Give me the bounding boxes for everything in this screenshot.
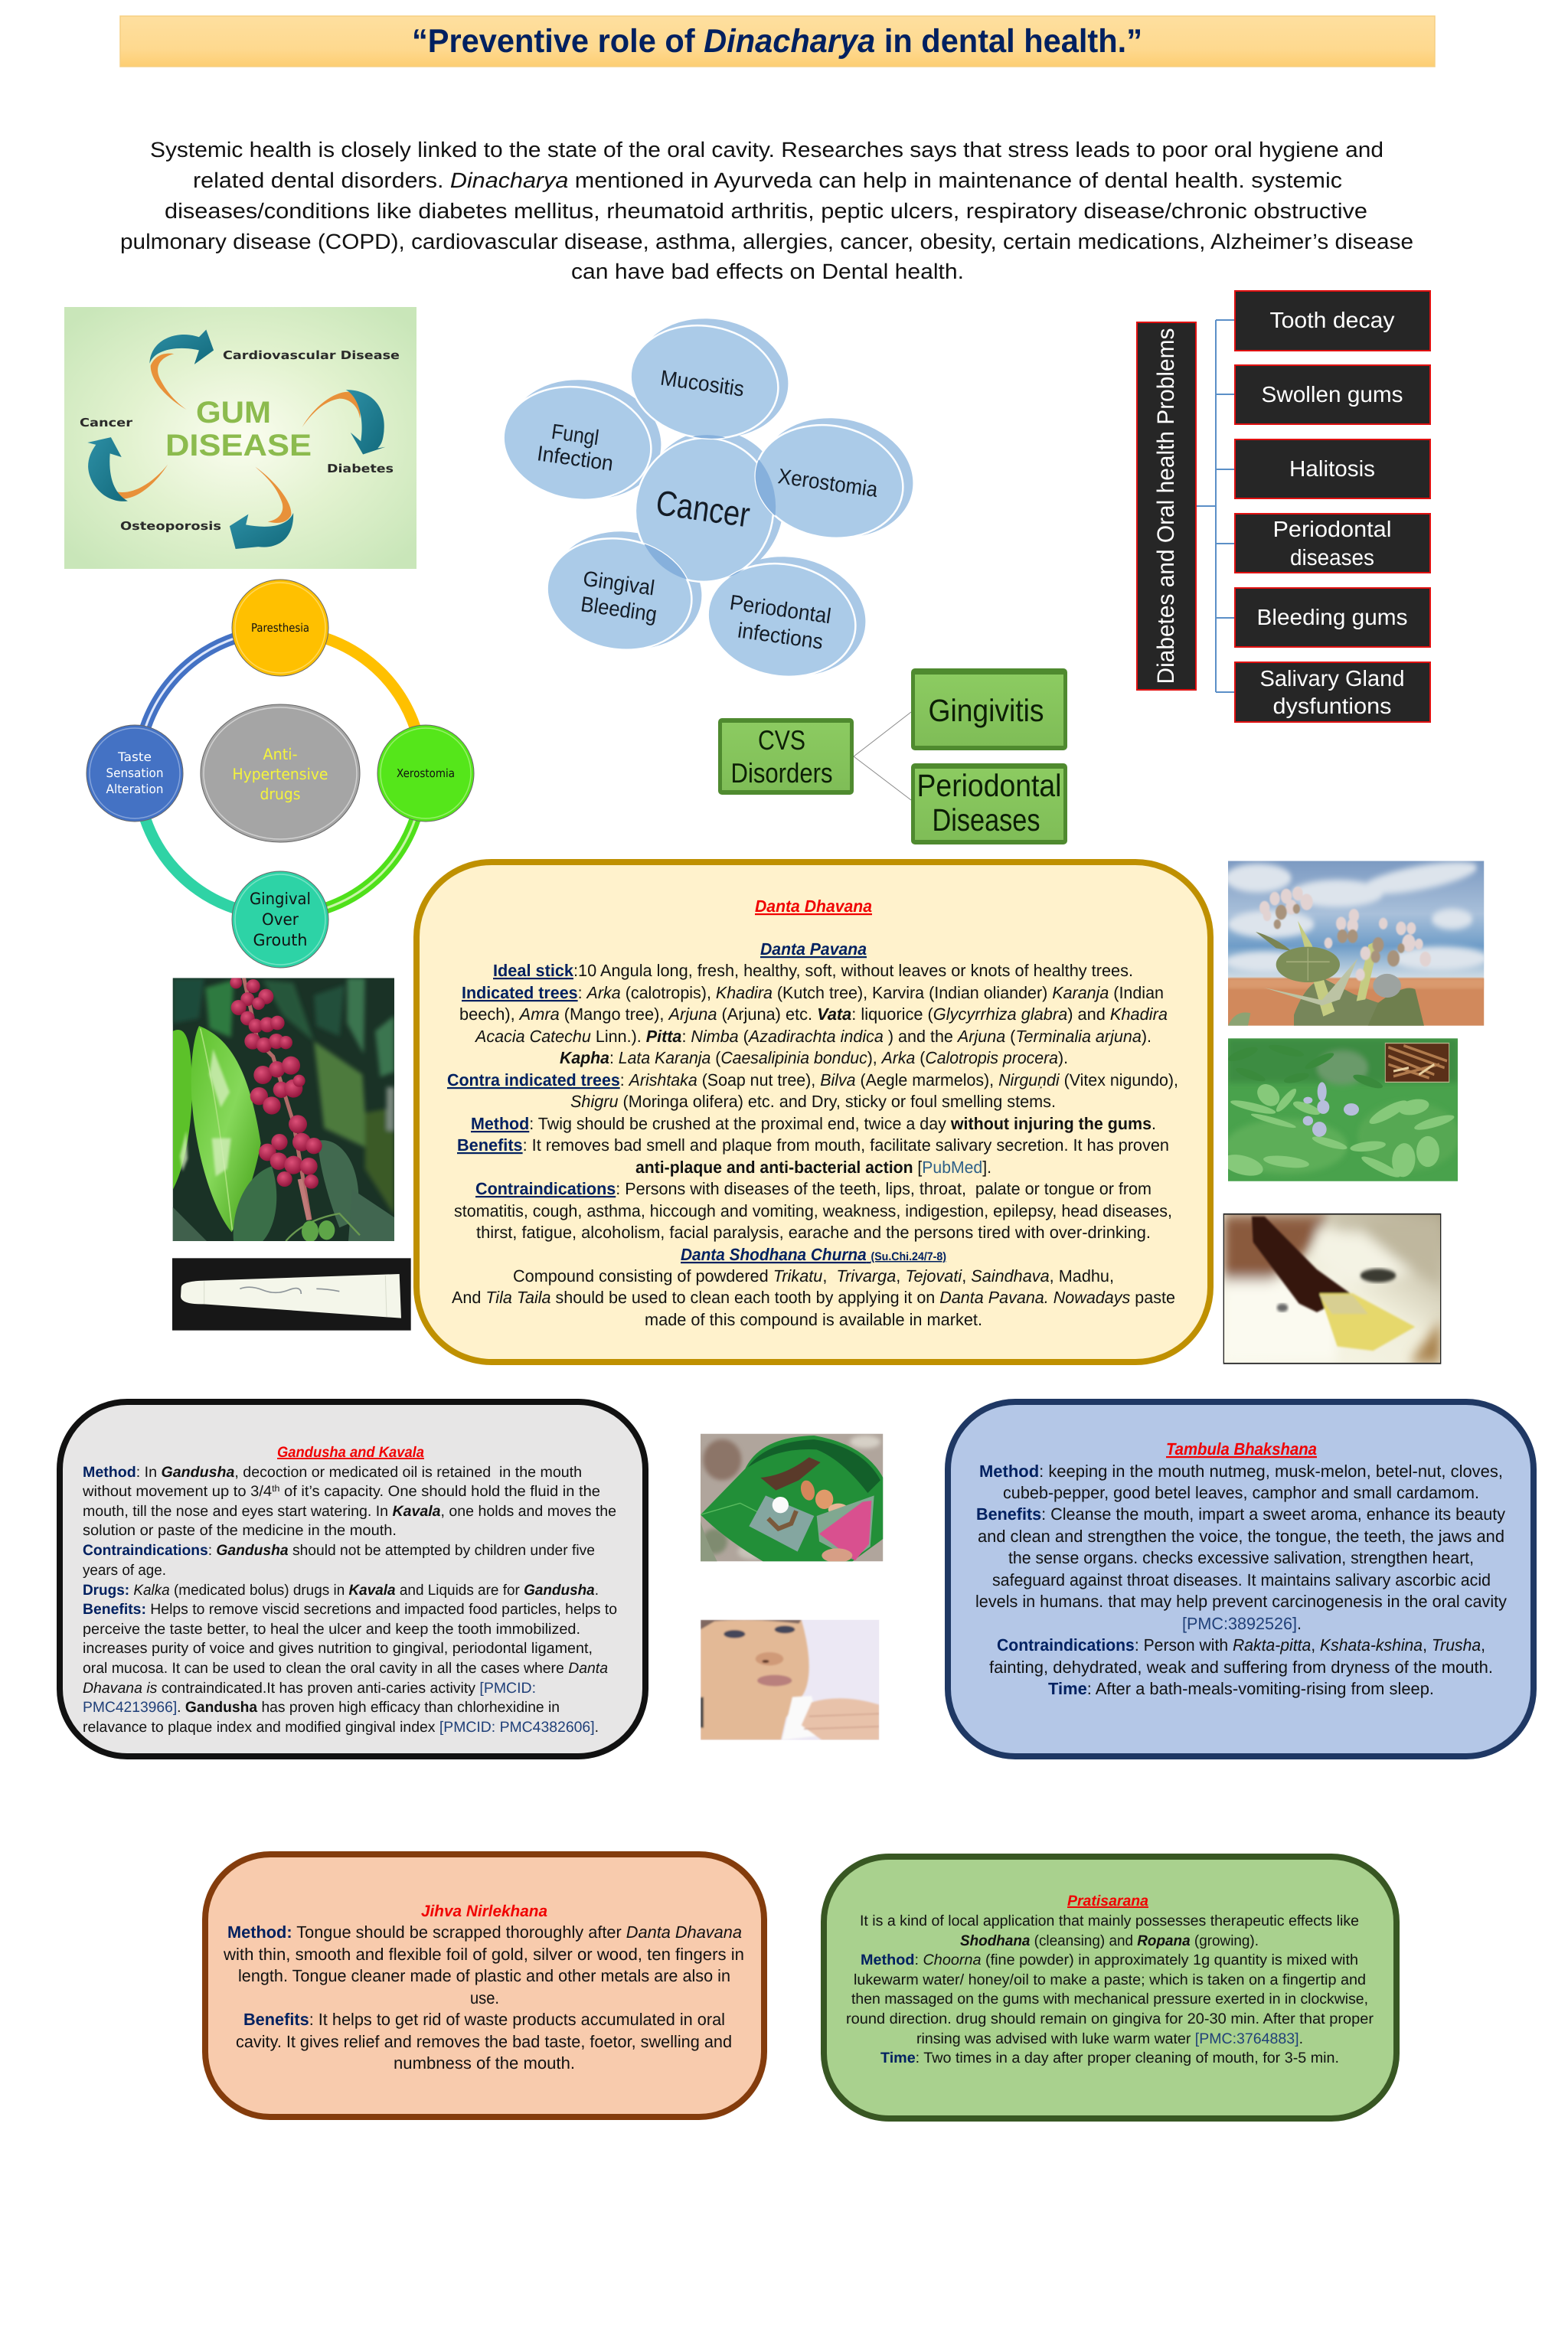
- body text: gandusha and kavala details: oral mucosa. It can be used to clean the oral cavity in all the cases where Danta: [83, 1660, 608, 1677]
- body text: jihva nirlekhana details: numbness of the mouth.: [394, 2053, 575, 2073]
- panel: gum disease cycle image: [64, 307, 416, 569]
- body text: gandusha and kavala details: increases purity of voice and gives nutrition to gingival, periodontal ligament,: [83, 1640, 593, 1657]
- chart: diabetes and oral health problems tree: [1137, 291, 1430, 722]
- body text: gandusha and kavala details: without movement up to 3/4: [83, 1483, 266, 1500]
- label: gum disease: [165, 396, 312, 462]
- body text: tambula bhakshana details: Benefits: Cleanse the mouth, impart a sweet aroma, enhance its beauty: [976, 1504, 1505, 1524]
- node: gingival over grouth: Gingival: [250, 890, 311, 908]
- body text: danta pavana details: Acacia Catechu Linn.). Pitta: Nimba (Azadirachta indica ) and the Arjuna (Terminalia arjuna).: [474, 1027, 1152, 1046]
- box: tooth decay: Tooth decay: [1269, 309, 1395, 333]
- box: periodontal diseases: Diseases: [933, 802, 1040, 838]
- labels: complications: [536, 366, 880, 654]
- body text: tambula bhakshana details: levels in humans. that may help prevent carcinogenesis in the oral cavity: [975, 1592, 1507, 1611]
- node: taste sensation alteration: Sensation: [106, 766, 164, 780]
- body text: danta pavana details: anti-plaque and anti-bacterial action [PubMed].: [635, 1158, 991, 1177]
- center: anti-hypertensive drugs: Hypertensive: [233, 765, 328, 783]
- center: anti-hypertensive drugs: [201, 704, 360, 842]
- body text: danta pavana details: Kapha: Lata Karanja (Caesalipinia bonduc), Arka (Calotropis procera).: [560, 1048, 1068, 1067]
- node: gingival over grouth: Over: [262, 910, 299, 929]
- box: periodontal diseases: Periodontal: [1272, 518, 1392, 542]
- panel: tambula bhakshana: [948, 1402, 1534, 1756]
- body text: danta pavana details: beech), Amra (Mango tree), Arjuna (Arjuna) etc. Vata: liquorice (Glycyrrhiza glabra) and Khadira: [459, 1004, 1168, 1024]
- box: cvs disorders: Disorders: [730, 757, 833, 789]
- photo: betel leaf with ingredients: [701, 1434, 883, 1563]
- labels: linked conditions: Cancer: [80, 416, 133, 430]
- body text: tambula bhakshana details: fainting, dehydrated, weak and suffering from dryness of the mouth.: [989, 1658, 1493, 1677]
- body text: gandusha and kavala details: Method: In Gandusha, decoction or medicated oil is retained in the mouth: [83, 1464, 582, 1481]
- photo: liquorice plant with root inset: [1221, 1038, 1460, 1181]
- ring arcs: [138, 631, 423, 916]
- labels: complications: Gingival: [582, 567, 656, 599]
- node: taste sensation alteration: Taste: [117, 750, 152, 764]
- box: bleeding gums: Bleeding gums: [1257, 606, 1407, 630]
- box: swollen gums: [1235, 365, 1430, 424]
- icon: circular arrows: [87, 330, 385, 549]
- heading: danta shodhana churna: Danta Shodhana Churna (Su.Chi.24/7-8): [681, 1245, 946, 1264]
- box: salivary gland dysfuntions: [1235, 662, 1430, 722]
- body text: danta shodhana churna details: And Tila Taila should be used to clean each tooth by applying it on Danta Pavana. Nowadays paste: [452, 1288, 1175, 1307]
- body text: gandusha and kavala details: perceive the taste better, to heal the ulcer and keep the tooth immobilized.: [83, 1621, 580, 1638]
- box: periodontal diseases: Periodontal: [917, 768, 1061, 803]
- labels: linked conditions: Osteoporosis: [120, 519, 221, 533]
- body text: danta pavana details: Contraindications: Persons with diseases of the teeth, lips, throat, palate or tongue or from: [475, 1179, 1152, 1198]
- body text: jihva nirlekhana details: [223, 1922, 744, 2073]
- box: cvs disorders: [718, 718, 854, 795]
- body text: jihva nirlekhana details: use.: [470, 1988, 499, 2007]
- body text: pratisarana details: [846, 1913, 1374, 2066]
- body text: gandusha and kavala details: Dhavana is contraindicated.It has proven anti-caries activity [PMCID:: [83, 1680, 536, 1697]
- body text: jihva nirlekhana details: cavity. It gives relief and removes the bad taste, foetor, swelling and: [236, 2032, 732, 2051]
- body text: danta pavana details: [447, 961, 1178, 1242]
- root: diabetes and oral health problems: [1137, 322, 1196, 690]
- introduction paragraph: can have bad effects on Dental health.: [571, 260, 964, 283]
- panel: danta dhavana: [416, 862, 1210, 1362]
- body text: danta pavana details: Method: Twig should be crushed at the proximal end, twice a day without injuring the gums.: [471, 1114, 1156, 1133]
- body text: pratisarana details: lukewarm water/ honey/oil to make a paste; which is taken on a fingertip and: [854, 1971, 1366, 1988]
- box: salivary gland dysfuntions: dysfuntions: [1272, 694, 1392, 719]
- body text: tambula bhakshana details: and clean and strengthen the voice, the tongue, the teeth, the jaws and: [978, 1527, 1504, 1546]
- body text: danta pavana details: stomatitis, cough, asthma, hiccough and vomiting, weakness, indigestion, epilepsy, head diseases,: [454, 1201, 1172, 1220]
- heading: gandusha and kavala: Gandusha and Kavala: [277, 1444, 424, 1461]
- heading: danta pavana: Danta Pavana: [760, 939, 867, 959]
- panel: pratisarana: [824, 1857, 1396, 2118]
- introduction paragraph: Systemic health is closely linked to the state of the oral cavity. Researches says that stress leads to poor oral hygiene and: [150, 138, 1383, 162]
- box: bleeding gums: [1235, 588, 1430, 647]
- chart: cancer oral complications cluster: [495, 307, 923, 688]
- labels: linked conditions: [80, 348, 400, 533]
- body text: gandusha and kavala details: PMC4213966]. Gandusha has proven high efficacy than chlorhexidine in: [83, 1699, 560, 1716]
- node: xerostomia: [377, 725, 474, 822]
- node: taste sensation alteration: [87, 725, 183, 822]
- body text: gandusha and kavala details: years of age.: [83, 1562, 166, 1579]
- photo: calotropis plant: [1225, 855, 1488, 1026]
- body text: gandusha and kavala details: Benefits: Helps to remove viscid secretions and impacted food particles, helps to: [83, 1601, 617, 1618]
- body text: danta pavana details: Benefits: It removes bad smell and plaque from mouth, facilitate salivary secretion. It has proven: [457, 1135, 1169, 1155]
- labels: complications: Bleeding: [580, 592, 658, 626]
- body text: pratisarana details: Method: Choorna (fine powder) in approximately 1g quantity is mixed with: [861, 1952, 1358, 1968]
- body text: gandusha and kavala details: solution or paste of the medicine in the mouth.: [83, 1522, 397, 1539]
- photo: woman gargling: [701, 1620, 879, 1740]
- body text: danta shodhana churna details: [452, 1266, 1175, 1329]
- body text: gandusha and kavala details: th: [272, 1483, 279, 1494]
- title banner: [120, 16, 1435, 67]
- box: gingivitis: [911, 668, 1067, 750]
- photo: coffee berries branch: [173, 976, 394, 1242]
- body text: tambula bhakshana details: the sense organs. checks excessive salivation, strengthen heart,: [1008, 1548, 1474, 1567]
- overlaps: [644, 435, 776, 580]
- body text: pratisarana details: then massaged on the gums with mechanical pressure exerted in in clockwise,: [851, 1991, 1368, 2007]
- node: gingival over grouth: Grouth: [253, 931, 308, 949]
- body text: danta pavana details: Shigru (Moringa olifera) etc. and Dry, sticky or foul smelling stems.: [570, 1092, 1056, 1111]
- box: swollen gums: Swollen gums: [1262, 383, 1403, 407]
- introduction paragraph: diseases/conditions like diabetes mellitus, rheumatoid arthritis, peptic ulcers, respiratory disease/chronic obstructive: [165, 199, 1367, 223]
- node: xerostomia: Xerostomia: [397, 766, 455, 780]
- body text: danta pavana details: Contra indicated trees: Arishtaka (Soap nut tree), Bilva (Aegle marmelos), Nirguṇdi (Vitex nigundo),: [447, 1070, 1178, 1089]
- body text: danta shodhana churna details: Compound consisting of powdered Trikatu, Trivarga, Tejovati, Saindhava, Madhu,: [513, 1266, 1114, 1285]
- body text: pratisarana details: round direction. drug should remain on gingiva for 20-30 min. After that proper: [846, 2011, 1374, 2027]
- box: gingivitis: Gingivitis: [928, 693, 1044, 728]
- connectors: [1196, 320, 1235, 692]
- labels: complications: Fungl: [550, 420, 600, 449]
- introduction paragraph: related dental disorders. Dinacharya mentioned in Ayurveda can help in maintenance of dental health. systemic: [193, 168, 1342, 192]
- node: paresthesia: Paresthesia: [251, 621, 309, 635]
- photo: danta shodhana paste tube: [172, 1258, 411, 1331]
- body text: tambula bhakshana details: safeguard against throat diseases. It maintains salivary ascorbic acid: [992, 1570, 1491, 1589]
- box: periodontal diseases: diseases: [1290, 546, 1374, 570]
- box: salivary gland dysfuntions: Salivary Gland: [1260, 667, 1404, 691]
- body text: gandusha and kavala details: Contraindications: Gandusha should not be attempted by children under five: [83, 1542, 595, 1559]
- body text: tambula bhakshana details: Time: After a bath-meals-vomiting-rising from sleep.: [1048, 1679, 1434, 1698]
- box: halitosis: [1235, 439, 1430, 498]
- body text: danta pavana details: thirst, fatigue, alcoholism, facial paralysis, earache and the persons tired with over-drinking.: [476, 1223, 1151, 1242]
- chart: cvs disorders tree: [718, 668, 1067, 844]
- body text: jihva nirlekhana details: Benefits: It helps to get rid of waste products accumulated in oral: [243, 2010, 725, 2029]
- body text: gandusha and kavala details: of it’s capacity. One should hold the fluid in the: [279, 1483, 600, 1500]
- box: tooth decay: [1235, 291, 1430, 351]
- photo: chewing twig brush: [1223, 1214, 1441, 1364]
- box: periodontal diseases: [911, 763, 1067, 844]
- title banner: “Preventive role of Dinacharya in dental health.”: [412, 23, 1142, 60]
- heading: jihva nirlekhana: Jihva Nirlekhana: [421, 1903, 547, 1920]
- panel: gandusha and kavala: [60, 1402, 645, 1756]
- body text: gandusha and kavala details: [82, 1464, 617, 1736]
- label: gum disease: GUM: [196, 396, 271, 430]
- labels: complications: Cancer: [654, 482, 753, 534]
- body text: jihva nirlekhana details: length. Tongue cleaner made of plastic and other metals are also in: [238, 1966, 730, 1985]
- body text: tambula bhakshana details: [975, 1462, 1507, 1698]
- box: cvs disorders: CVS: [758, 724, 805, 756]
- box: periodontal diseases: [1235, 514, 1430, 573]
- body text: gandusha and kavala details: relavance to plaque index and modified gingival index [PMCID: PMC4382606].: [83, 1719, 599, 1736]
- labels: complications: Infection: [536, 441, 615, 475]
- box: halitosis: Halitosis: [1289, 457, 1375, 482]
- labels: linked conditions: Diabetes: [327, 462, 394, 475]
- body text: pratisarana details: rinsing was advised with luke warm water [PMC:3764883].: [916, 2030, 1303, 2047]
- root: diabetes and oral health problems: Diabetes and Oral health Problems: [1152, 328, 1179, 684]
- body text: danta shodhana churna details: made of this compound is available in market.: [645, 1310, 982, 1329]
- chart: anti-hypertensive drugs ring: [87, 580, 474, 968]
- body text: tambula bhakshana details: cubeb-pepper, good betel leaves, camphor and small cardamom.: [1003, 1483, 1479, 1502]
- labels: complications: Periodontal: [728, 590, 832, 628]
- node: paresthesia: [232, 580, 328, 676]
- heading: danta dhavana: Danta Dhavana: [755, 897, 872, 916]
- heading: pratisarana: Pratisarana: [1067, 1893, 1148, 1909]
- body text: danta pavana details: Indicated trees: Arka (calotropis), Khadira (Kutch tree), Karvira (Indian oliander) Karanja (Indian: [462, 983, 1164, 1002]
- body text: tambula bhakshana details: Method: keeping in the mouth nutmeg, musk-melon, betel-nut, cloves,: [979, 1462, 1503, 1481]
- node: gingival over grouth: [232, 871, 328, 968]
- body text: tambula bhakshana details: [PMC:3892526].: [1182, 1614, 1302, 1633]
- heading: tambula bhakshana: Tambula Bhakshana: [1166, 1439, 1317, 1459]
- labels: linked conditions: Cardiovascular Disease: [223, 348, 400, 362]
- center: anti-hypertensive drugs: drugs: [260, 785, 300, 803]
- labels: complications: infections: [737, 618, 825, 654]
- introduction paragraph: [120, 138, 1413, 283]
- panel: jihva nirlekhana: [205, 1854, 764, 2117]
- label: gum disease: DISEASE: [165, 429, 312, 462]
- body text: jihva nirlekhana details: with thin, smooth and flexible foil of gold, silver or wood, ten fingers in: [223, 1945, 744, 1964]
- body text: gandusha and kavala details: Drugs: Kalka (medicated bolus) drugs in Kavala and Liquids are for Gandusha.: [83, 1582, 599, 1599]
- body text: jihva nirlekhana details: Method: Tongue should be scrapped thoroughly after Danta Dhavana: [227, 1922, 742, 1942]
- body text: pratisarana details: Time: Two times in a day after proper cleaning of mouth, for 3-5 min.: [880, 2050, 1339, 2066]
- body text: pratisarana details: Shodhana (cleansing) and Ropana (growing).: [960, 1932, 1259, 1949]
- body text: tambula bhakshana details: Contraindications: Person with Rakta-pitta, Kshata-kshina, Trusha,: [997, 1635, 1485, 1655]
- body text: gandusha and kavala details: mouth, till the nose and eyes start watering. In Kavala, one holds and moves the: [83, 1503, 616, 1520]
- introduction paragraph: pulmonary disease (COPD), cardiovascular disease, asthma, allergies, cancer, obesity, certain medications, Alzheimer’s disease: [120, 230, 1413, 253]
- labels: complications: Mucositis: [659, 366, 746, 401]
- node: taste sensation alteration: Alteration: [106, 782, 164, 796]
- labels: complications: Xerostomia: [776, 464, 880, 501]
- body text: danta pavana details: Ideal stick:10 Angula long, fresh, healthy, soft, without leaves or knots of healthy trees.: [493, 961, 1133, 980]
- center: anti-hypertensive drugs: Anti-: [263, 745, 297, 763]
- body text: pratisarana details: It is a kind of local application that mainly possesses therapeutic effects like: [860, 1913, 1359, 1929]
